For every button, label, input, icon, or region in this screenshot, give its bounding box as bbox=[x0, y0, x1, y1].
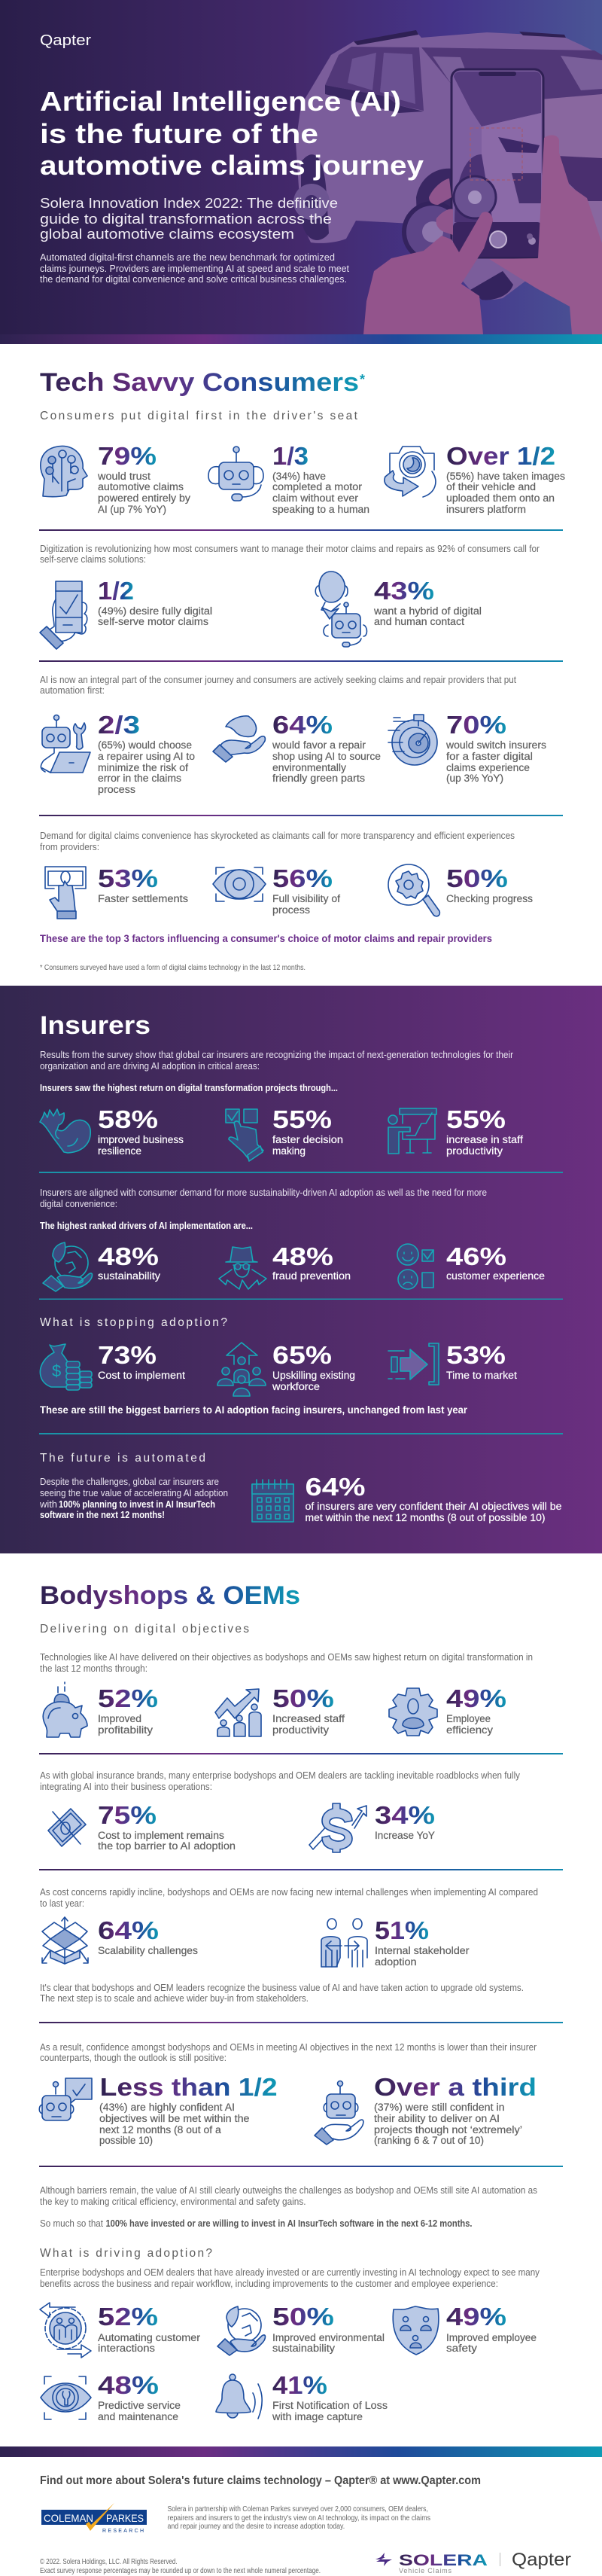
callout: top 3 factors: These are the top 3 factors influencing a consumer's choice of motor claims and repair providers bbox=[40, 932, 492, 944]
stat: 1/3: claim without ever bbox=[272, 492, 359, 504]
subheading: Consumers put digital first in the driver's seat bbox=[40, 410, 358, 422]
paragraph: roadblocks: As with global insurance brands, many enterprise bodyshops and OEM dealers are tackling inevitable roadblocks when fully bbox=[40, 1770, 520, 1781]
stat: 48% predictive: 48% bbox=[98, 2371, 159, 2399]
stat: over a third: Over a third bbox=[374, 2073, 537, 2101]
stat: 34%: 34% bbox=[375, 1801, 435, 1829]
roof rail bbox=[354, 30, 566, 45]
paragraph: confidence: As a result, confidence amongst bodyshops and OEMs in meeting AI objectives in the next 12 months is lower than their insurer bbox=[40, 2041, 537, 2053]
legal text: Exact survey response percentages may be rounded up or down to the next whole numeral percentage. bbox=[40, 2567, 321, 2575]
stat: 49% safety: safety bbox=[446, 2343, 477, 2354]
stat: 34%: Increase YoY bbox=[375, 1830, 435, 1841]
paragraph: 100% planning: software in the next 12 months! bbox=[40, 1509, 165, 1520]
stat: 55% staff: 55% bbox=[446, 1105, 506, 1133]
paragraph: demand for convenience: from providers: bbox=[40, 841, 99, 852]
stat: 79%: automotive claims bbox=[98, 481, 184, 492]
paragraph: value outweighs challenges: Although barriers remain, the value of AI still clearly outweighs the challenges as bodyshop and OEMs still site AI automation as bbox=[40, 2184, 537, 2196]
paragraph: enterprise benefits bbox=[40, 2267, 540, 2289]
panel: footer bbox=[40, 2474, 571, 2575]
stat: 41%: 41% bbox=[272, 2371, 327, 2399]
stat: 2/3: 2/3 bbox=[98, 711, 140, 739]
logo: Solera: Vehicle Claims bbox=[399, 2567, 451, 2574]
icon: gear with person bbox=[389, 1688, 437, 1736]
icon: robot with chat check bbox=[39, 2078, 92, 2120]
call to action: Find out more about Solera's future claims technology – Qapter® at www.Qapter.com bbox=[40, 2474, 481, 2487]
stat: 48% fraud: 48% bbox=[272, 1242, 333, 1270]
stat: 55% bbox=[272, 1105, 343, 1157]
stat: 51%: adoption bbox=[375, 1956, 417, 1968]
survey note: and repair journey and the desire to increase adoption today. bbox=[167, 2522, 345, 2531]
stat: 79%: 79% bbox=[98, 442, 157, 470]
icon: magnifier with gear bbox=[388, 864, 439, 916]
stat: 64%: shop using AI to source bbox=[272, 751, 381, 762]
stat: 48% sustainability bbox=[98, 1242, 160, 1282]
icon: agent and robot bbox=[315, 572, 367, 647]
heading: Bodyshops & OEMs bbox=[40, 1581, 300, 1610]
stat: 52% automating: Automating customer bbox=[98, 2332, 201, 2343]
icon: hand holding robot bbox=[315, 2081, 363, 2145]
stat: 56%: process bbox=[272, 904, 310, 916]
subheading: highest return: Insurers saw the highest return on digital transformation projects through... bbox=[40, 1082, 338, 1093]
paragraph: automation first: AI is now an integral part of the consumer journey and consumers are actively seeking claims and repair providers that put bbox=[40, 674, 516, 685]
stat: 48% fraud: fraud prevention bbox=[272, 1270, 351, 1282]
stat: 2/3 bbox=[98, 711, 195, 795]
stat: 55%: faster decision bbox=[272, 1134, 343, 1145]
stat: less than 1/2: possible 10) bbox=[99, 2135, 153, 2146]
stat: 41% bbox=[272, 2371, 388, 2422]
icon: piggy bank bbox=[43, 1682, 87, 1737]
stat: 53% time to market: Time to market bbox=[446, 1370, 517, 1381]
gradient band above footer bbox=[0, 2446, 602, 2457]
logo: Coleman Parkes bbox=[41, 2503, 147, 2534]
panel: bodyshops and OEMs bbox=[39, 1581, 563, 2422]
stat: 65% bbox=[272, 1341, 355, 1392]
paragraph: confidence: counterparts, though the outlook is still positive: bbox=[40, 2052, 227, 2063]
icon: money bag and coins: $ bbox=[52, 1361, 61, 1380]
icon: eye with wrench bbox=[41, 2376, 91, 2419]
stat: 64% bbox=[272, 711, 381, 784]
stat: 73% bbox=[98, 1341, 185, 1381]
stat: 43%: want a hybrid of digital bbox=[373, 605, 482, 617]
icon: pointer on checkbox bbox=[226, 1109, 263, 1161]
stat: 48% sustainability: 48% bbox=[98, 1242, 159, 1270]
paragraph: roadblocks bbox=[40, 1770, 520, 1792]
stat: 52% automating: 52% bbox=[98, 2303, 158, 2331]
stat: 50% environmental: sustainability bbox=[272, 2343, 335, 2354]
stat: 1/3: speaking to a human bbox=[272, 504, 369, 515]
headlight bbox=[498, 137, 540, 153]
logo: Solera: SOLERA bbox=[399, 2552, 488, 2569]
paragraph: 100% planning bbox=[39, 1476, 228, 1520]
icon: robot with headset bbox=[208, 447, 263, 501]
paragraph: enterprise benefits: benefits across the business and repair workflow, including improvements to the customer and employee experience: bbox=[40, 2278, 498, 2289]
stat: 48% predictive: and maintenance bbox=[98, 2411, 178, 2422]
icon: box with arrows bbox=[42, 1917, 88, 1964]
stat: 65%: 65% bbox=[272, 1341, 332, 1369]
stat: 53% time to market: 53% bbox=[446, 1341, 506, 1369]
stat: 46%: customer experience bbox=[446, 1270, 545, 1282]
panel: hero banner bbox=[0, 0, 602, 334]
title bbox=[40, 86, 424, 181]
intro paragraph: claims journeys. Providers are implementing AI at speed and scale to meet bbox=[40, 263, 349, 274]
stat: 55%: making bbox=[272, 1145, 306, 1157]
title: automotive claims journey bbox=[40, 150, 424, 181]
stat: less than 1/2 bbox=[99, 2073, 278, 2146]
stat: 51%: 51% bbox=[375, 1916, 429, 1944]
paragraph: clear value bbox=[40, 1982, 524, 2004]
stat: 65%: Upskilling existing bbox=[272, 1370, 355, 1381]
paragraph: internal challenges bbox=[40, 1886, 538, 1909]
stat: 56%: 56% bbox=[272, 864, 333, 892]
stat: 53%: 53% bbox=[98, 864, 158, 892]
subtitle: guide to digital transformation across the bbox=[40, 212, 332, 227]
stat: 49%: 49% bbox=[446, 1684, 506, 1712]
callout: biggest barriers: These are still the biggest barriers to AI adoption facing insurers, unchanged from last year bbox=[40, 1404, 468, 1416]
stat: over a third: their ability to deliver on AI bbox=[374, 2113, 500, 2124]
panel: tech savvy consumers bbox=[39, 368, 565, 972]
stat: 49% safety: Improved employee bbox=[446, 2332, 537, 2343]
icon: dollar with arrow bbox=[309, 1803, 366, 1852]
stat: 46%: 46% bbox=[446, 1242, 506, 1270]
paragraph: internal challenges: to last year: bbox=[40, 1898, 84, 1909]
stat: 1/2: self-serve motor claims bbox=[98, 616, 208, 627]
paragraph: aligned with demand: digital convenience: bbox=[40, 1198, 117, 1209]
icon: flexed arm bbox=[40, 1109, 90, 1153]
logo: Qapter: Qapter bbox=[40, 32, 91, 49]
stat: 52%: profitability bbox=[98, 1724, 153, 1736]
stat: 50% bbox=[272, 1684, 345, 1736]
paragraph: clear value: The next step is to scale and achieve wider buy-in from stakeholders. bbox=[40, 1992, 309, 2004]
stat: 55% staff: increase in staff bbox=[446, 1134, 523, 1145]
stat: less than 1/2: next 12 months (8 out of a bbox=[99, 2124, 221, 2135]
heading: Insurers bbox=[40, 1011, 150, 1040]
survey note: repairers and insurers to get the industry's view on AI technology, its impact on the claims bbox=[167, 2514, 430, 2523]
stat: 52% automating: interactions bbox=[98, 2343, 155, 2354]
stat: 51%: Internal stakeholder bbox=[375, 1945, 470, 1956]
stat: 41%: First Notification of Loss bbox=[272, 2400, 388, 2411]
stat: 51% bbox=[375, 1916, 470, 1968]
stat: 43%: and human contact bbox=[374, 616, 464, 627]
stat: 50%: Checking progress bbox=[446, 893, 533, 904]
illustration: car photographed with a phone bbox=[293, 30, 602, 334]
stat: 64%: friendly green parts bbox=[272, 773, 365, 784]
icon: hand holding phone bbox=[40, 581, 87, 649]
logo: Qapter small: Qapter bbox=[512, 2550, 571, 2570]
stat: 70%: would switch insurers bbox=[445, 739, 546, 751]
subheading: Delivering on digital objectives bbox=[40, 1623, 249, 1636]
stat: 50%: 50% bbox=[446, 864, 508, 892]
stat: 50% environmental: Improved environmental bbox=[272, 2332, 385, 2343]
paragraph: automation first bbox=[40, 674, 516, 696]
survey note bbox=[167, 2504, 430, 2531]
stat: 48% sustainability: sustainability bbox=[98, 1270, 160, 1282]
front wing and hood highlight bbox=[469, 94, 602, 265]
stat: 79%: AI (up 7% YoY) bbox=[98, 504, 166, 515]
icon: head with circuits bbox=[41, 446, 87, 497]
stat: 56% bbox=[272, 864, 340, 916]
icon: hand holding leaf bbox=[213, 716, 265, 762]
icon: hand with globe bbox=[43, 1242, 92, 1291]
paragraph: 100% planning: with bbox=[39, 1498, 57, 1510]
stat: 53% time to market bbox=[446, 1341, 517, 1381]
subheading: what is driving adoption: What is driving adoption? bbox=[40, 2247, 212, 2260]
paragraph: delivered objectives: the last 12 months through: bbox=[40, 1663, 147, 1674]
stat: 55% staff: productivity bbox=[446, 1145, 503, 1157]
logo: Solera bbox=[375, 2552, 488, 2574]
stat: 58%: resilience bbox=[98, 1145, 141, 1157]
stat: 50%: productivity bbox=[272, 1724, 329, 1736]
paragraph: digitization: Digitization is revolutionizing how most consumers want to manage their motor claims and repairs as 92% of consumers call for bbox=[40, 543, 540, 554]
stat: 64%: 64% bbox=[272, 711, 333, 739]
stat: 1/2 bbox=[98, 577, 212, 627]
footnote: * Consumers surveyed have used a form of digital claims technology in the last 12 months. bbox=[40, 963, 306, 972]
stat: 64% confident: met within the next 12 months (8 out of possible 10) bbox=[306, 1512, 545, 1523]
survey note: Solera in partnership with Coleman Parkes surveyed over 2,000 consumers, OEM dealers, bbox=[167, 2504, 428, 2514]
stat: 2/3: a repairer using AI to bbox=[98, 751, 195, 762]
stat: 73%: 73% bbox=[98, 1341, 157, 1369]
paragraph: delivered objectives bbox=[40, 1651, 533, 1674]
paragraph: digitization bbox=[40, 543, 540, 565]
heading: Tech Savvy Consumers bbox=[40, 368, 359, 397]
paragraph: 100% planning: 100% planning to invest in AI InsurTech bbox=[59, 1498, 215, 1510]
stat: 1/2: 1/2 bbox=[98, 577, 134, 605]
stat: 2/3: minimize the risk of bbox=[98, 762, 188, 773]
windshield bbox=[421, 47, 602, 105]
stat: 48% predictive bbox=[98, 2371, 181, 2422]
stat: 34% bbox=[375, 1801, 435, 1841]
paragraph: 100% planning: seeing the true value of accelerating AI adoption bbox=[40, 1487, 228, 1498]
stat: over 1/2 bbox=[446, 442, 565, 515]
stat: over a third: projects though not ‘extremely’ bbox=[374, 2124, 522, 2135]
stat: 2/3: process bbox=[98, 784, 135, 795]
icon: crossed out cash bbox=[48, 1809, 86, 1846]
stat: 52%: 52% bbox=[98, 1684, 158, 1712]
stat: 73%: Cost to implement bbox=[98, 1370, 185, 1381]
stat: 46% bbox=[446, 1242, 545, 1282]
phone bbox=[451, 69, 543, 258]
grille bbox=[557, 156, 602, 201]
panel: insurers bbox=[0, 986, 602, 1553]
icon: calendar bbox=[252, 1480, 293, 1522]
icon: people under roof arrow bbox=[217, 1343, 266, 1396]
paragraph: survey results bbox=[40, 1049, 514, 1072]
icon: two people with arrows bbox=[321, 1919, 367, 1967]
intro paragraph bbox=[40, 252, 349, 285]
icon: eye in frame bbox=[213, 867, 266, 901]
paragraph: enterprise benefits: Enterprise bodyshops and OEM dealers that have already invested or are currently investing in AI technology expect to see many bbox=[40, 2267, 540, 2278]
stat: 55% staff bbox=[446, 1105, 523, 1157]
icon: arrow to bracket bbox=[388, 1343, 439, 1385]
stat: 70%: (up 3% YoY) bbox=[446, 773, 503, 784]
stat: 58% bbox=[98, 1105, 184, 1157]
icon: camera with rotate arrow bbox=[385, 447, 436, 497]
stat: 79%: would trust bbox=[97, 471, 150, 482]
icon: detective bbox=[219, 1247, 266, 1289]
subheading: highest drivers: The highest ranked drivers of AI implementation are... bbox=[40, 1220, 253, 1231]
stat: 56%: Full visibility of bbox=[272, 893, 340, 904]
stat: 41%: with image capture bbox=[272, 2411, 363, 2422]
stat: less than 1/2: objectives will be met within the bbox=[99, 2113, 250, 2124]
icon: gear with people and arrows bbox=[40, 2303, 91, 2358]
paragraph: confidence bbox=[40, 2041, 537, 2063]
stat: 50% bbox=[446, 864, 533, 904]
stat: 58%: 58% bbox=[98, 1105, 158, 1133]
side windows bbox=[325, 47, 424, 111]
icon: smiley ratings bbox=[397, 1244, 433, 1289]
asterisk: * bbox=[360, 372, 365, 387]
icon: rising chart with people bbox=[215, 1689, 261, 1736]
stat: over 1/2: insurers platform bbox=[446, 504, 526, 515]
stat: 53% bbox=[98, 864, 188, 904]
stat: over 1/2: uploaded them onto an bbox=[446, 492, 555, 504]
stat: 64% confident: 64% bbox=[306, 1473, 366, 1501]
stat: 2/3: (65%) would choose bbox=[98, 739, 192, 751]
car body bbox=[296, 32, 602, 300]
icon: robot with wrench and laptop bbox=[41, 715, 90, 773]
left hand bbox=[363, 212, 493, 334]
paragraph: 100% planning: Despite the challenges, global car insurers are bbox=[40, 1476, 219, 1487]
paragraph: survey results: organization and are driving AI adoption in critical areas: bbox=[40, 1060, 260, 1072]
paragraph: internal challenges: As cost concerns rapidly incline, bodyshops and OEMs are now facing new internal challenges when implementing AI compared bbox=[40, 1886, 538, 1898]
stat: 70%: claims experience bbox=[446, 762, 530, 773]
stat: 70%: 70% bbox=[446, 711, 506, 739]
stat: 48% fraud bbox=[272, 1242, 351, 1282]
stat: 58%: improved business bbox=[98, 1134, 184, 1145]
paragraph: demand for convenience bbox=[40, 830, 515, 852]
paragraph: digitization: self-serve claims solutions: bbox=[40, 553, 146, 565]
stat: 52% bbox=[98, 1684, 158, 1736]
stat: 1/2: (49%) desire fully digital bbox=[98, 605, 212, 617]
stat: 2/3: error in the claims bbox=[98, 773, 181, 784]
title: is the future of the bbox=[40, 118, 318, 149]
title: Artificial Intelligence (AI) bbox=[40, 86, 401, 117]
stat: 1/3: (34%) have bbox=[272, 471, 326, 482]
subheading: what is stopping adoption: What is stopping adoption? bbox=[40, 1316, 227, 1329]
paragraph: value outweighs challenges bbox=[40, 2184, 537, 2207]
stat: 75% bbox=[98, 1801, 236, 1852]
stat: less than 1/2: Less than 1/2 bbox=[100, 2073, 278, 2101]
stat: 49% bbox=[446, 1684, 506, 1736]
logo: Coleman Parkes: PARKES bbox=[106, 2512, 144, 2524]
stat: less than 1/2: (43%) are highly confident AI bbox=[99, 2102, 235, 2113]
icon: presenter with chart bbox=[388, 1108, 436, 1154]
icon: money bag and coins bbox=[40, 1344, 92, 1390]
stat: 70%: for a faster digital bbox=[446, 751, 533, 762]
rear wheel bbox=[301, 154, 329, 240]
paragraph: delivered objectives: Technologies like AI have delivered on their objectives as bodyshops and OEMs saw highest return on digital transformation in bbox=[40, 1651, 533, 1663]
stat: 52%: Improved bbox=[98, 1713, 141, 1724]
paragraph: aligned with demand bbox=[40, 1187, 487, 1209]
stat: 64% confident: of insurers are very confident their AI objectives will be bbox=[306, 1501, 561, 1512]
subtitle bbox=[40, 196, 338, 242]
icon: hand with globe bbox=[217, 2306, 265, 2355]
logo: Coleman Parkes: RESEARCH bbox=[102, 2529, 144, 2534]
gradient band below hero bbox=[0, 334, 602, 344]
stat: over 1/2: (55%) have taken images bbox=[446, 471, 565, 482]
stat: 43%: 43% bbox=[374, 577, 434, 605]
legal text bbox=[40, 2558, 321, 2575]
icon: hand on cash bbox=[45, 867, 86, 919]
stat: 64% confident bbox=[306, 1473, 561, 1523]
paragraph: demand for convenience: Demand for digital claims convenience has skyrocketed as claimants call for more transparency and efficient experiences bbox=[40, 830, 515, 841]
stat: 75%: 75% bbox=[98, 1801, 157, 1829]
stat: 49% safety: 49% bbox=[446, 2303, 506, 2331]
stat: over 1/2: of their vehicle and bbox=[446, 481, 536, 492]
stat: 1/3: completed a motor bbox=[272, 481, 363, 492]
stat: 65%: workforce bbox=[272, 1381, 320, 1392]
paragraph: 100% invested: 100% have invested or are willing to invest in AI InsurTech software in the next 6-12 months. bbox=[105, 2218, 473, 2229]
front wheel bbox=[416, 169, 451, 241]
paragraph: automation first: automation first: bbox=[40, 684, 105, 696]
stat: 79%: powered entirely by bbox=[98, 492, 190, 504]
paragraph: clear value: It's clear that bodyshops and OEM leaders recognize the business value of AI and have taken action to upgrade old systems. bbox=[40, 1982, 524, 1993]
stat: over a third: (ranking 6 & 7 out of 10) bbox=[374, 2135, 484, 2146]
stat: 79% bbox=[97, 442, 190, 515]
legal text: © 2022. Solera Holdings, LLC. All Rights Reserved. bbox=[40, 2558, 178, 2566]
paragraph: aligned with demand: Insurers are aligned with consumer demand for more sustainability-driven AI adoption as well as the need for more bbox=[40, 1187, 487, 1198]
subtitle: Solera Innovation Index 2022: The definitive bbox=[40, 196, 338, 211]
stat: over a third: (37%) were still confident in bbox=[374, 2102, 504, 2113]
stat: 48% predictive: Predictive service bbox=[98, 2400, 181, 2411]
stat: 50% environmental: 50% bbox=[272, 2303, 334, 2331]
stat: 49%: Employee bbox=[446, 1713, 491, 1724]
right hand bbox=[489, 136, 602, 334]
stat: 70% bbox=[445, 711, 546, 784]
icon: stopwatch bbox=[388, 715, 437, 765]
stat: 64%: environmentally bbox=[272, 762, 346, 773]
stat: 43% bbox=[373, 577, 482, 627]
logo: Coleman Parkes: COLEMAN bbox=[44, 2512, 93, 2524]
stat: 75%: Cost to implement remains bbox=[98, 1830, 224, 1841]
subheading: the future is automated: The future is automated bbox=[40, 1452, 205, 1465]
stat: 49% safety bbox=[446, 2303, 537, 2354]
paragraph: survey results: Results from the survey show that global car insurers are recognizing the impact of next-generation technologies for their bbox=[40, 1049, 514, 1060]
stat: 50% environmental bbox=[272, 2303, 385, 2354]
stat: 50%: Increased staff bbox=[272, 1713, 345, 1724]
stat: 55%: 55% bbox=[272, 1105, 332, 1133]
stat: 64%: would favor a repair bbox=[272, 739, 366, 751]
intro paragraph: the demand for digital convenience and solve critical business challenges. bbox=[40, 273, 347, 285]
stat: 64% scalability: Scalability challenges bbox=[98, 1945, 198, 1956]
stat: 50%: 50% bbox=[272, 1684, 334, 1712]
icon: ringing bell bbox=[216, 2374, 262, 2419]
paragraph: 100% invested: So much so that bbox=[40, 2218, 103, 2229]
stat: 64% scalability: 64% bbox=[98, 1916, 159, 1944]
paragraph: roadblocks: integrating AI into their business operations: bbox=[40, 1781, 212, 1792]
subtitle: global automotive claims ecosystem bbox=[40, 227, 294, 242]
stat: over a third bbox=[374, 2073, 537, 2146]
stat: 1/3 bbox=[272, 442, 369, 515]
intro paragraph: Automated digital-first channels are the new benchmark for optimized bbox=[40, 252, 335, 263]
stat: 75%: the top barrier to AI adoption bbox=[98, 1840, 236, 1852]
paragraph: value outweighs challenges: the key to making critical efficiency, environmental and safety gains. bbox=[40, 2196, 306, 2207]
icon: shield with people bbox=[393, 2306, 439, 2355]
stat: 49%: efficiency bbox=[446, 1724, 493, 1736]
stat: 52% automating bbox=[98, 2303, 201, 2354]
stat: 53%: Faster settlements bbox=[98, 893, 188, 904]
stat: over 1/2: Over 1/2 bbox=[446, 442, 555, 470]
stat: 1/3: 1/3 bbox=[272, 442, 309, 470]
stat: 64% scalability bbox=[98, 1916, 198, 1956]
